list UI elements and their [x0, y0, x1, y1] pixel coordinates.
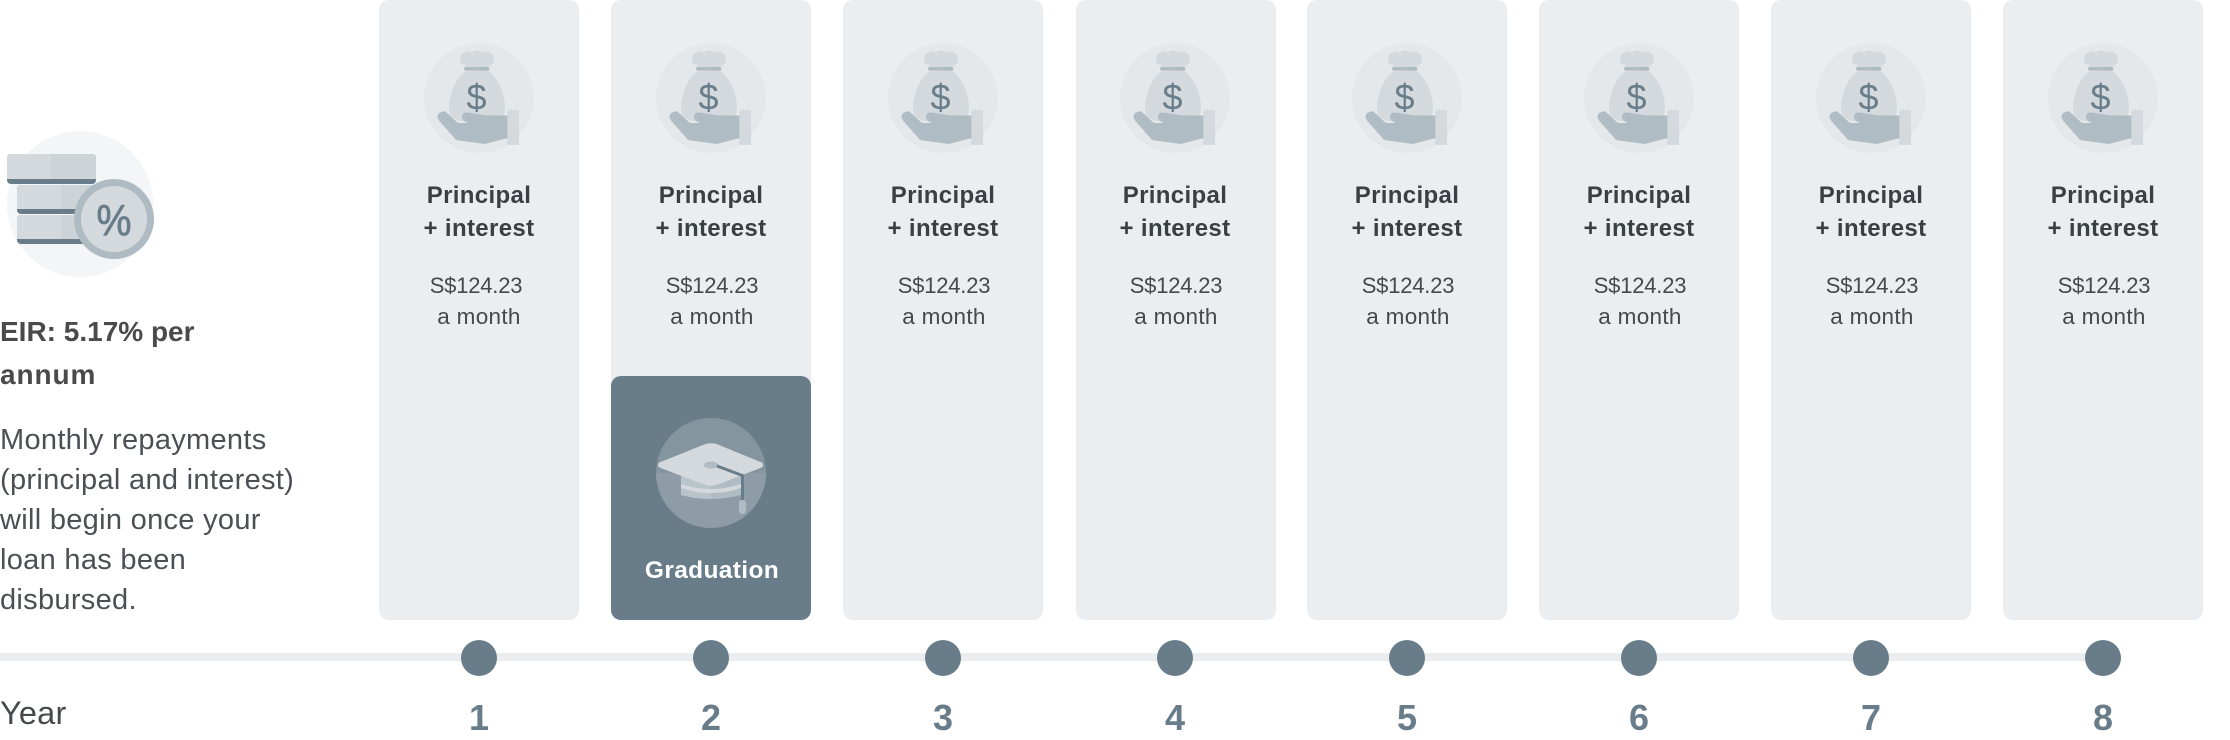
timeline marker 2: [693, 640, 729, 676]
year number 4: 4: [1165, 696, 1185, 738]
icon: coins with percent badge: [7, 131, 154, 277]
timeline marker 4: [1157, 640, 1193, 676]
amount: S$124.23: [1130, 273, 1222, 298]
icon: money bag on hand: $: [1394, 76, 1415, 117]
panel: year 3: [843, 0, 1043, 620]
heading: principal plus interest: + interest: [888, 215, 998, 242]
year number 7: 7: [1861, 696, 1881, 738]
amount: S$124.23: [430, 273, 522, 298]
period: a month: [1598, 304, 1682, 329]
timeline marker 6: [1621, 640, 1657, 676]
heading: principal plus interest: + interest: [1120, 215, 1230, 242]
amount: S$124.23: [1826, 273, 1918, 298]
panel: year 4: [1076, 0, 1276, 620]
amount: S$124.23: [1594, 273, 1686, 298]
icon: money bag on hand: [1366, 50, 1447, 145]
icon: money bag on hand: [2062, 50, 2143, 145]
timeline marker 5: [1389, 640, 1425, 676]
icon: money bag on hand: $: [930, 76, 951, 117]
panel: year 7: [1771, 0, 1971, 620]
heading: principal plus interest: [656, 182, 766, 242]
icon: money bag on hand: $: [1858, 76, 1879, 117]
timeline track: [0, 653, 2103, 661]
heading: EIR rate: EIR: 5.17% per: [0, 316, 195, 346]
text block: repayment description: (principal and interest): [0, 464, 294, 496]
timeline marker 7: [1853, 640, 1889, 676]
heading: principal plus interest: [1816, 182, 1926, 242]
heading: principal plus interest: [1584, 182, 1694, 242]
period: a month: [1134, 304, 1218, 329]
timeline marker 8: [2085, 640, 2121, 676]
text block: repayment description: loan has been: [0, 544, 186, 576]
heading: principal plus interest: + interest: [1584, 215, 1694, 242]
period: a month: [1366, 304, 1450, 329]
heading: principal plus interest: + interest: [656, 215, 766, 242]
amount: S$124.23: [898, 273, 990, 298]
heading: principal plus interest: Principal: [1587, 182, 1691, 209]
text block: repayment description: disbursed.: [0, 584, 137, 616]
heading: principal plus interest: [2048, 182, 2158, 242]
icon: money bag on hand: [902, 50, 983, 145]
timeline marker 3: [925, 640, 961, 676]
heading: principal plus interest: Principal: [659, 182, 763, 209]
icon: money bag on hand: [1134, 50, 1215, 145]
period: a month: [670, 304, 754, 329]
text block: repayment description: [0, 424, 294, 616]
panel: year 5: [1307, 0, 1507, 620]
icon: money bag on hand: $: [1162, 76, 1183, 117]
heading: principal plus interest: Principal: [2051, 182, 2155, 209]
icon: money bag on hand: $: [1626, 76, 1647, 117]
year number 8: 8: [2093, 696, 2113, 738]
panel: year 2: [611, 0, 811, 620]
period: a month: [437, 304, 521, 329]
panel: year 1: [379, 0, 579, 620]
icon: money bag on hand: $: [698, 76, 719, 117]
heading: principal plus interest: + interest: [1816, 215, 1926, 242]
icon: money bag on hand: $: [466, 76, 487, 117]
heading: principal plus interest: [424, 182, 534, 242]
heading: principal plus interest: Principal: [427, 182, 531, 209]
icon: money bag on hand: [670, 50, 751, 145]
year number 3: 3: [933, 696, 953, 738]
heading: principal plus interest: + interest: [1352, 215, 1462, 242]
year number 5: 5: [1397, 696, 1417, 738]
text block: repayment description: Monthly repayments: [0, 424, 267, 456]
period: a month: [1830, 304, 1914, 329]
heading: principal plus interest: [888, 182, 998, 242]
amount: S$124.23: [2058, 273, 2150, 298]
icon: money bag on hand: $: [2090, 76, 2111, 117]
period: a month: [902, 304, 986, 329]
period: a month: [2062, 304, 2146, 329]
heading: principal plus interest: + interest: [424, 215, 534, 242]
panel: graduation: [611, 376, 811, 620]
heading: EIR rate: [0, 316, 195, 390]
heading: principal plus interest: + interest: [2048, 215, 2158, 242]
heading: principal plus interest: Principal: [1123, 182, 1227, 209]
heading: principal plus interest: [1352, 182, 1462, 242]
icon: graduation cap: [656, 418, 766, 528]
heading: principal plus interest: Principal: [1355, 182, 1459, 209]
year number 6: 6: [1629, 696, 1649, 738]
heading: principal plus interest: [1120, 182, 1230, 242]
axis label: year: Year: [0, 695, 66, 731]
amount: S$124.23: [666, 273, 758, 298]
label: graduation: Graduation: [645, 557, 779, 584]
icon: money bag on hand: [1598, 50, 1679, 145]
panel: year 6: [1539, 0, 1739, 620]
year number 2: 2: [701, 696, 721, 738]
icon: coins with percent badge: %: [96, 196, 132, 245]
icon: money bag on hand: [1830, 50, 1911, 145]
heading: principal plus interest: Principal: [1819, 182, 1923, 209]
panel: year 8: [2003, 0, 2203, 620]
text block: repayment description: will begin once your: [0, 504, 261, 536]
heading: EIR rate: annum: [0, 358, 96, 390]
year number 1: 1: [469, 696, 489, 738]
timeline marker 1: [461, 640, 497, 676]
heading: principal plus interest: Principal: [891, 182, 995, 209]
icon: money bag on hand: [438, 50, 519, 145]
amount: S$124.23: [1362, 273, 1454, 298]
